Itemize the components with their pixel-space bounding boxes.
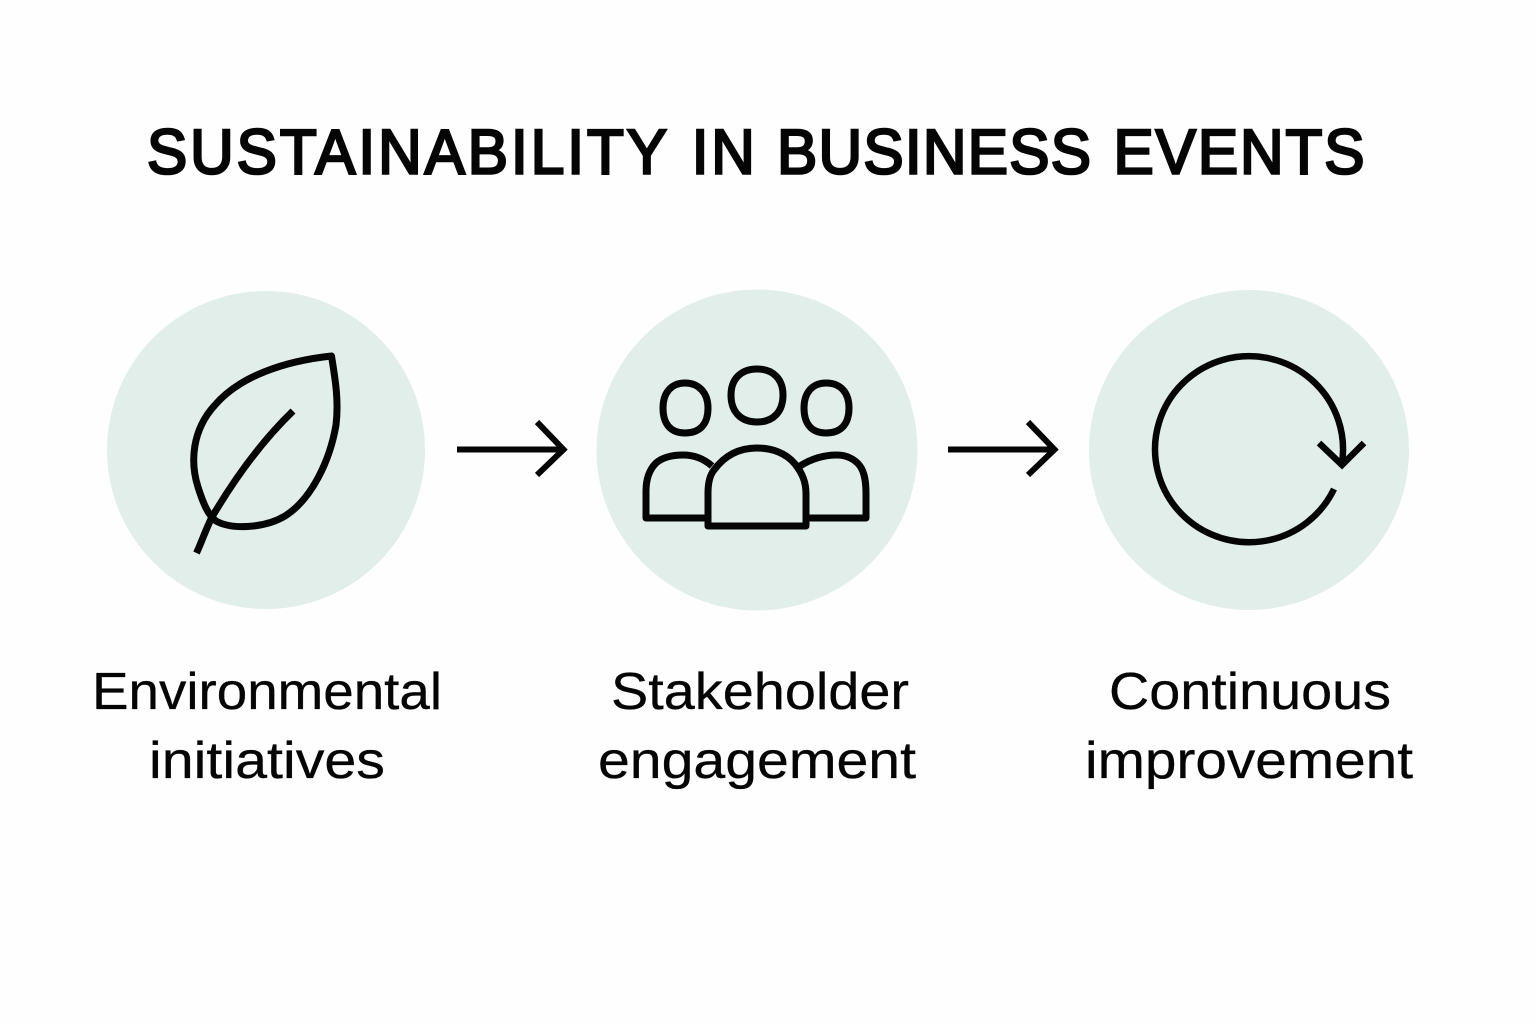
label: continuous improvement: improvement [1085,732,1414,790]
label: continuous improvement: Continuous [1109,663,1391,721]
circle: stakeholder background [596,290,918,610]
label: stakeholder engagement: Stakeholder [611,663,909,721]
icon: group of people [646,369,866,526]
arrow: first to second [457,422,564,475]
panel: stakeholder engagement [596,290,918,790]
icon: circular arrow [1155,356,1364,542]
circle: environmental background [107,291,425,609]
panel: environmental initiatives [92,291,442,790]
label: environmental initiatives: Environmental [92,663,442,721]
title: BUSINESS [777,117,1091,188]
circle: continuous improvement background [1089,290,1409,610]
label: stakeholder engagement: engagement [598,732,917,790]
icon: leaf [194,356,337,553]
arrow: second to third [948,422,1054,475]
panel: continuous improvement [1085,290,1414,790]
title: IN [692,117,755,188]
title: EVENTS [1113,117,1364,188]
title: SUSTAINABILITY [147,117,667,188]
label: environmental initiatives: initiatives [149,732,385,790]
